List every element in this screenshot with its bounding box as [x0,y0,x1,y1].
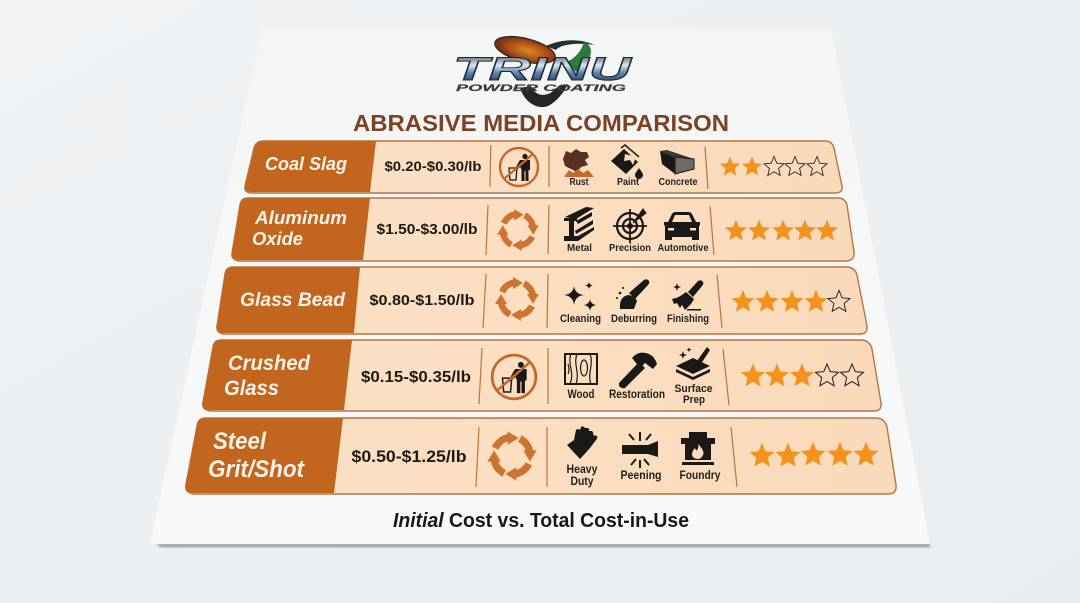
row: Steel Grit/Shot [186,418,896,494]
row panel [232,198,854,261]
icon: non-recyclable [492,355,536,399]
icon: automotive car [664,212,700,240]
logo ember shape [492,31,558,69]
material name block [245,141,376,192]
icon: metal beam [564,207,594,241]
material name: Aluminum [254,207,347,228]
row panel [203,340,881,411]
icon: cleaning sparkles [564,282,596,311]
label: Finishing: Finishing [667,313,709,325]
label: Wood: Wood [568,389,594,401]
icon: recyclable [497,209,539,251]
label: Concrete: Concrete [658,177,698,188]
material name: Steel [213,428,267,455]
label: Precision: Precision [609,242,651,254]
row panel [245,141,842,193]
label: Deburring: Deburring [611,313,657,325]
material name: Coal Slag [265,154,347,174]
label: Heavy: Heavy [566,464,598,476]
logo tagline: POWDER COATING [456,83,626,93]
rating: 5 of 5 stars [750,442,878,467]
label: Surface: Surface [674,383,712,395]
icon: finishing brush [672,280,703,310]
label: Automotive: Automotive [658,242,709,254]
material name line 2: Grit/Shot [208,456,305,483]
row: Coal Slag [245,141,842,193]
footer caption: Initial Cost vs. Total Cost-in-Use [393,509,689,532]
price: $0.20-$0.30/lb [384,158,482,174]
price: $0.50-$1.25/lb [352,448,466,466]
rating: 5 of 5 stars [725,219,838,240]
price: $1.50-$3.00/lb [376,222,478,238]
material name line 2: Oxide [252,228,303,249]
rating: 4 of 5 stars [732,290,850,312]
material name block [186,418,343,493]
icon: heavy duty glove [567,426,597,459]
label: Paint: Paint [617,177,640,188]
logo swoosh [546,40,594,50]
logo [453,31,633,107]
row panel [186,418,896,494]
material name line 2: Glass [224,376,279,400]
material name: Glass Bead [240,289,346,311]
rating: 3 of 5 stars [741,363,864,386]
icon: precision target [613,209,647,243]
rating: 2 of 5 stars [720,156,827,176]
label: Cleaning: Cleaning [560,313,601,325]
icon: recyclable [487,431,537,481]
logo lower emblem [520,84,568,107]
logo wordmark: TRINU [453,51,633,87]
icon: surface prep [676,347,710,380]
price: $0.15-$0.35/lb [361,369,471,386]
icon: peening [622,432,658,468]
icon: foundry furnace [681,432,715,465]
label: Peening: Peening [620,470,662,482]
row panel [217,267,867,334]
label: Rust: Rust [570,177,589,188]
icon: recyclable [495,277,539,321]
label: Foundry: Foundry [680,470,721,482]
label: Restoration: Restoration [609,389,665,401]
icon: rust [563,149,594,177]
label: Prep: Prep [683,394,705,406]
logo green shape [567,42,591,72]
icon: deburring tool [616,279,649,309]
row: Aluminum Oxide [232,198,854,261]
icon: hammer [619,353,657,388]
icon: non-recyclable [500,148,538,186]
label: Metal: Metal [567,242,592,254]
paper sheet [150,28,930,544]
paper shadow [156,544,930,547]
price: $0.80-$1.50/lb [370,292,474,309]
icon: paint [611,145,643,179]
material name block [203,340,352,410]
icon: wood [565,354,597,384]
material name block [232,198,370,260]
material name block [217,267,360,333]
title: ABRASIVE MEDIA COMPARISON [353,110,729,136]
label: Duty: Duty [570,476,594,488]
icon: concrete [660,150,694,174]
row: Glass Bead [217,267,867,334]
material name: Crushed [228,351,311,375]
row: Crushed Glass [203,340,881,411]
